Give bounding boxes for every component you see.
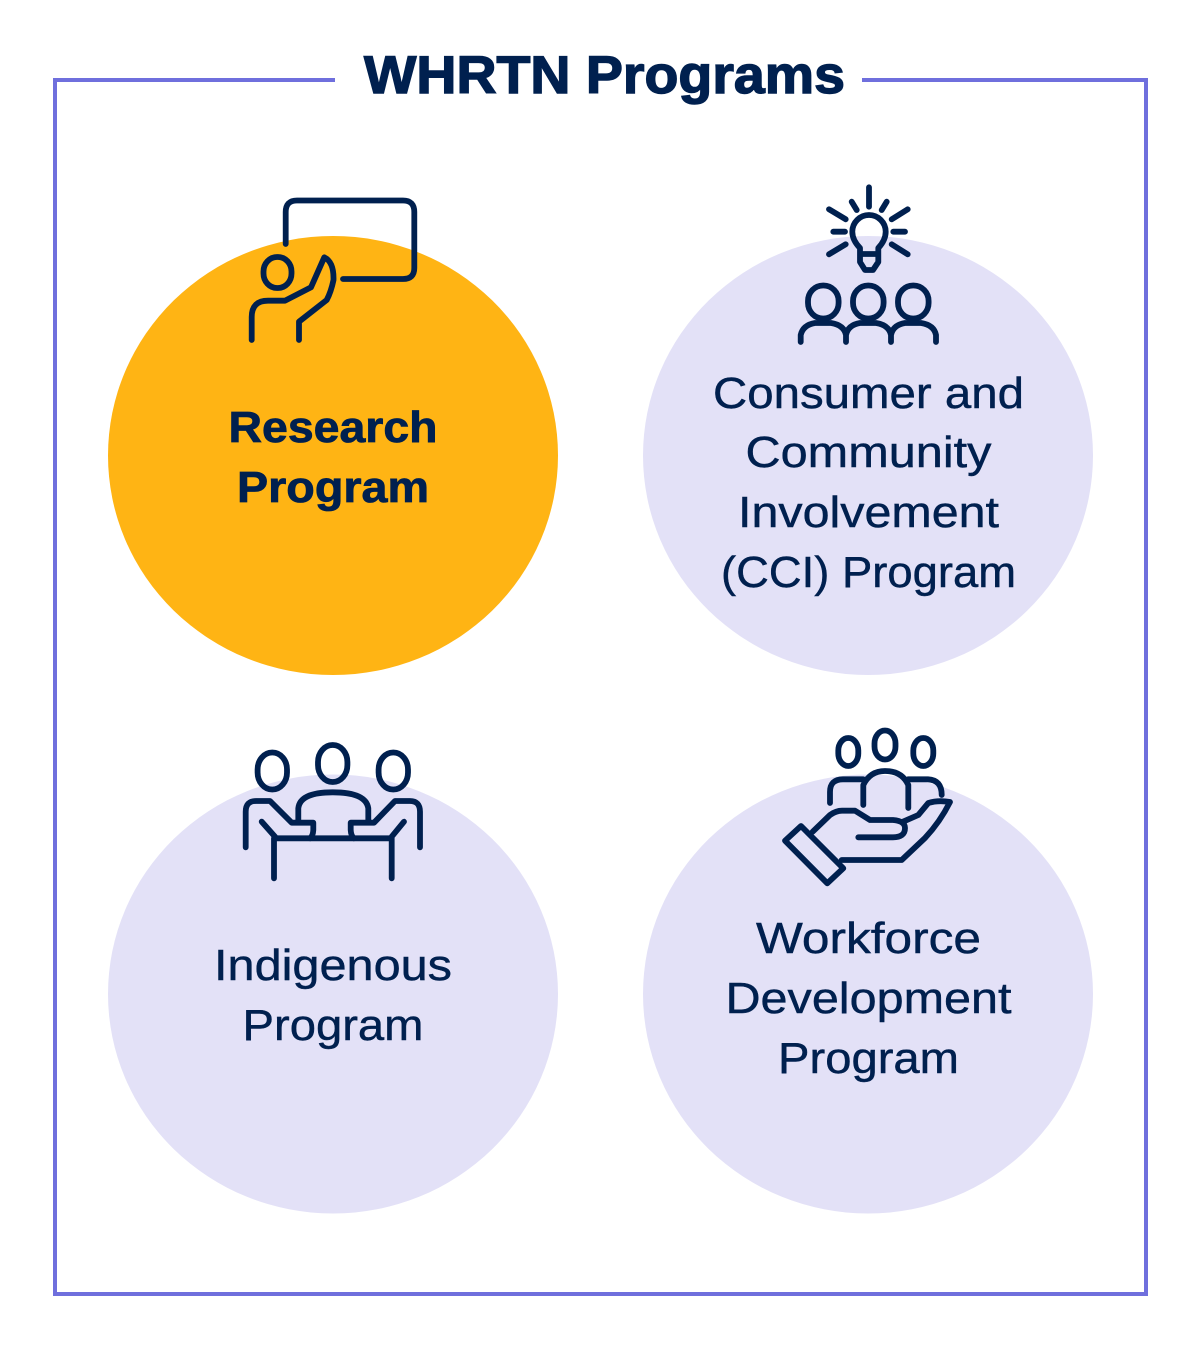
icon: presenter at board [252, 200, 414, 340]
label: CCI program: Consumer and [713, 369, 1024, 418]
label: workforce development program: Program [778, 1034, 959, 1083]
circle: CCI [643, 236, 1093, 675]
icon: people around table [246, 745, 420, 878]
icon: lightbulb over group [801, 187, 936, 342]
label: CCI program: Community [746, 428, 992, 477]
circle: research [108, 236, 558, 675]
label: research program: Program [237, 463, 429, 512]
circle: workforce [643, 774, 1093, 1214]
label: workforce development program: Workforce [756, 914, 981, 963]
label: indigenous program: Indigenous [214, 941, 452, 990]
label: CCI program [713, 369, 1024, 597]
label: CCI program: (CCI) Program [721, 548, 1016, 597]
icon: hand holding people [785, 730, 950, 883]
panel: indigenous program [108, 745, 558, 1214]
circle: indigenous [108, 774, 558, 1214]
label: indigenous program [214, 941, 452, 1050]
panel: research program [108, 200, 558, 675]
label: workforce development program: Development [726, 974, 1012, 1023]
label: indigenous program: Program [242, 1001, 424, 1050]
label: research program [228, 403, 438, 512]
label: workforce development program [726, 914, 1012, 1083]
label: research program: Research [228, 403, 438, 452]
panel: workforce development program [643, 730, 1093, 1214]
panel: CCI program [643, 187, 1093, 675]
title: WHRTN Programs [364, 46, 845, 105]
label: CCI program: Involvement [738, 488, 999, 537]
